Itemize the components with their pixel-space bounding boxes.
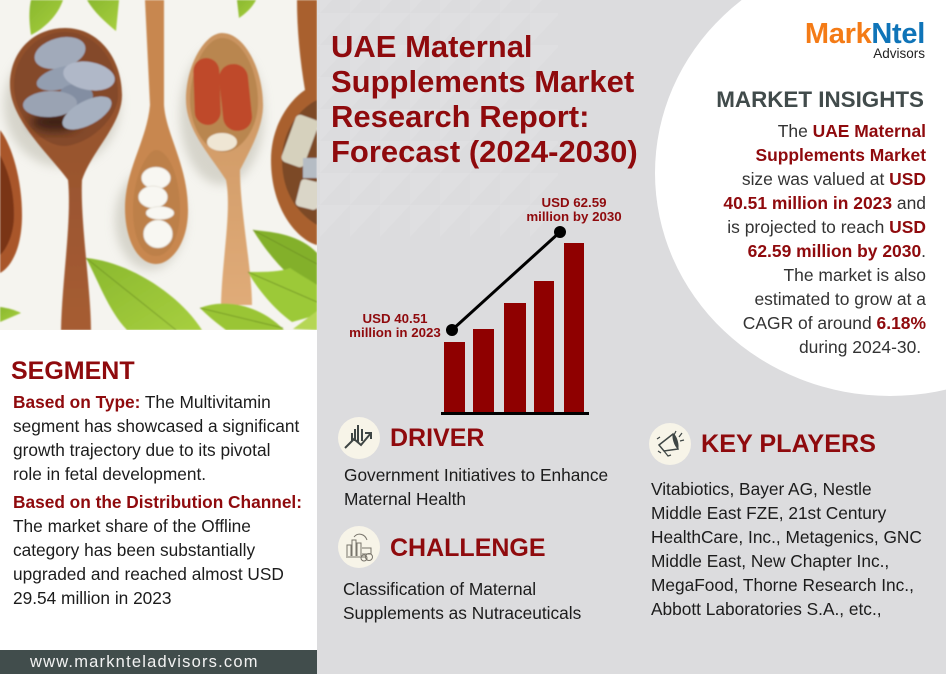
challenge text: Supplements as Nutraceuticals [343, 603, 581, 623]
market insights text: is projected to reach USD [727, 217, 926, 237]
key players text: HealthCare, Inc., Metagenics, GNC [651, 527, 922, 547]
white circle panel [655, 0, 946, 396]
shadows [4, 43, 264, 270]
pills [22, 32, 117, 136]
segment by distribution channel [13, 492, 302, 608]
market insights text: 40.51 million in 2023 and [723, 193, 926, 213]
footer bar [0, 650, 317, 674]
bar chart: million by 2030 [526, 209, 622, 224]
icon: key players megaphone [649, 423, 691, 465]
key players text: Vitabiotics, Bayer AG, Nestle [651, 479, 872, 499]
segment by type: Based on Type: The Multivitamin [13, 392, 271, 412]
logo: MarkNtel [805, 18, 925, 50]
segment by distribution channel: The market share of the Offline [13, 516, 251, 536]
title: Research Report: [331, 99, 589, 134]
market insights text: CAGR of around 6.18% [743, 313, 926, 333]
footer bar: www.marknteladvisors.com [30, 653, 259, 671]
market insights text: size was valued at USD [742, 169, 926, 189]
segment by distribution channel: upgraded and reached almost USD [13, 564, 284, 584]
title: UAE Maternal [331, 29, 533, 64]
bottom leaves [86, 230, 317, 330]
key players text [651, 479, 922, 619]
key players text: Middle East FZE, 21st Century [651, 503, 886, 523]
driver text: Government Initiatives to Enhance [344, 465, 608, 485]
logo: Advisors [873, 46, 925, 61]
label 2023: USD 40.51 [362, 311, 428, 326]
axis [441, 412, 589, 415]
segment heading: SEGMENT [11, 357, 135, 385]
bars [444, 243, 584, 412]
title [331, 29, 638, 169]
market insights text: 62.59 million by 2030. [748, 241, 926, 261]
segment by distribution channel: category has been substantially [13, 540, 255, 560]
segment by distribution channel: 29.54 million in 2023 [13, 588, 172, 608]
segment by type [13, 392, 300, 484]
top leaves [0, 0, 256, 322]
challenge text [343, 579, 581, 623]
market insights text [723, 121, 926, 357]
label 2030: USD 62.59 [541, 195, 607, 210]
market insights text: The UAE Maternal [778, 121, 926, 141]
segment by type: growth trajectory due to its pivotal [13, 440, 270, 460]
key players text: Abbott Laboratories S.A., etc., [651, 599, 882, 619]
market insights text: The market is also [784, 265, 926, 285]
photo: spoons with supplements [0, 0, 317, 330]
trend line [446, 226, 566, 336]
challenge heading: CHALLENGE [390, 534, 546, 562]
key players heading: KEY PLAYERS [701, 430, 876, 458]
bar chart [349, 195, 622, 415]
key players text: Middle East, New Chapter Inc., [651, 551, 889, 571]
driver text [344, 465, 608, 509]
segment by type: role in fetal development. [13, 464, 206, 484]
bar chart: million in 2023 [349, 325, 441, 340]
segment by type: segment has showcased a significant [13, 416, 299, 436]
market insights heading: MARKET INSIGHTS [716, 87, 924, 112]
segment by distribution channel: Based on the Distribution Channel: [13, 492, 302, 512]
market insights text: Supplements Market [755, 145, 926, 165]
market insights text: estimated to grow at a [754, 289, 926, 309]
key players text: MegaFood, Thorne Research Inc., [651, 575, 914, 595]
title: Supplements Market [331, 64, 634, 99]
title: Forecast (2024-2030) [331, 134, 638, 169]
left white panel [0, 0, 317, 674]
icon: driver [338, 417, 380, 459]
background triangle pattern [318, 0, 558, 237]
market insights text: during 2024-30. [799, 337, 921, 357]
icon: challenge [338, 526, 380, 568]
driver heading: DRIVER [390, 424, 484, 452]
challenge text: Classification of Maternal [343, 579, 536, 599]
driver text: Maternal Health [344, 489, 466, 509]
spoons [125, 0, 188, 264]
